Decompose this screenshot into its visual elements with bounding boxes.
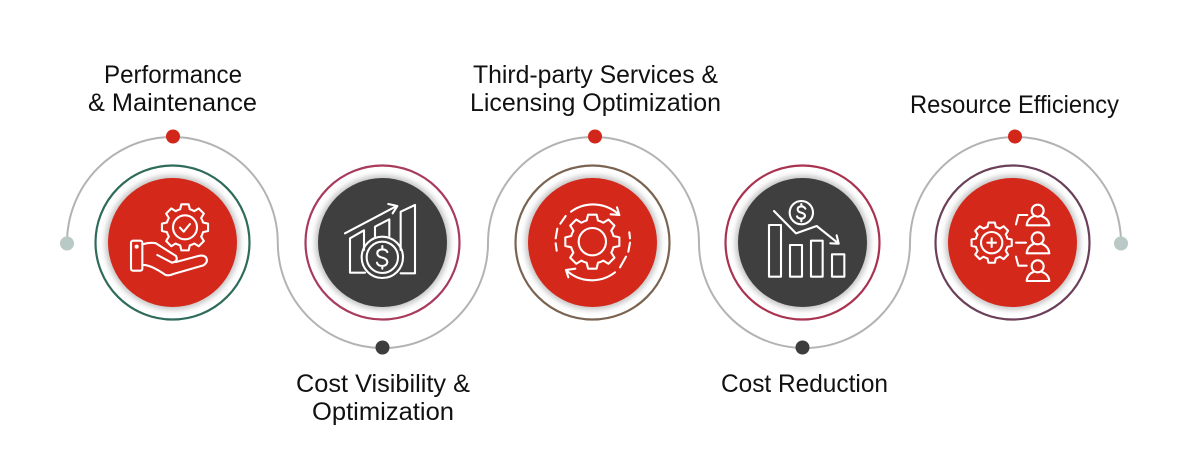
heading: Performance & Maintenance	[88, 61, 257, 117]
badge circle	[105, 175, 240, 310]
step 3: Third-party Services & Licensing Optimization	[470, 61, 721, 320]
marker dot	[588, 130, 602, 144]
icon: gear with cycle arrows	[556, 204, 630, 280]
step 5: Resource Efficiency	[910, 91, 1119, 320]
step 1: Performance & Maintenance	[88, 61, 257, 320]
heading: Cost Reduction: Cost Reduction	[721, 370, 888, 398]
marker dot	[1008, 130, 1022, 144]
badge circle	[735, 175, 870, 310]
timeline start dot	[60, 236, 74, 250]
outer ring	[726, 166, 880, 320]
heading: Third-party Services & Licensing Optimization: Licensing Optimization	[470, 89, 721, 117]
outer ring	[516, 166, 670, 320]
outer ring	[936, 166, 1090, 320]
icon: rising bars with dollar coin	[345, 204, 415, 278]
marker dot	[796, 340, 810, 354]
heading: Resource Efficiency: Resource Efficiency	[910, 91, 1119, 119]
icon: gear linked to three people	[972, 205, 1049, 281]
badge circle	[525, 175, 660, 310]
outer ring	[306, 166, 460, 320]
heading: Third-party Services & Licensing Optimization: Third-party Services &	[473, 61, 718, 89]
heading: Third-party Services & Licensing Optimization	[470, 61, 721, 117]
icon: hand holding gear with check	[131, 204, 208, 275]
heading: Cost Visibility & Optimization: Cost Visibility &	[296, 370, 470, 398]
connector: winding timeline path	[67, 137, 1121, 348]
heading: Performance & Maintenance: Performance	[104, 61, 242, 89]
badge circle	[945, 175, 1080, 310]
timeline end dot	[1114, 236, 1128, 250]
step 2: Cost Visibility & Optimization	[296, 166, 470, 426]
heading: Performance & Maintenance: & Maintenance	[88, 89, 257, 117]
marker dot	[166, 130, 180, 144]
heading: Cost Visibility & Optimization	[296, 370, 470, 426]
heading: Cost Visibility & Optimization: Optimization	[312, 398, 454, 426]
marker dot	[376, 340, 390, 354]
outer ring	[96, 166, 250, 320]
icon: falling bars with dollar coin	[769, 201, 844, 277]
step 4: Cost Reduction	[721, 166, 888, 398]
badge circle	[315, 175, 450, 310]
